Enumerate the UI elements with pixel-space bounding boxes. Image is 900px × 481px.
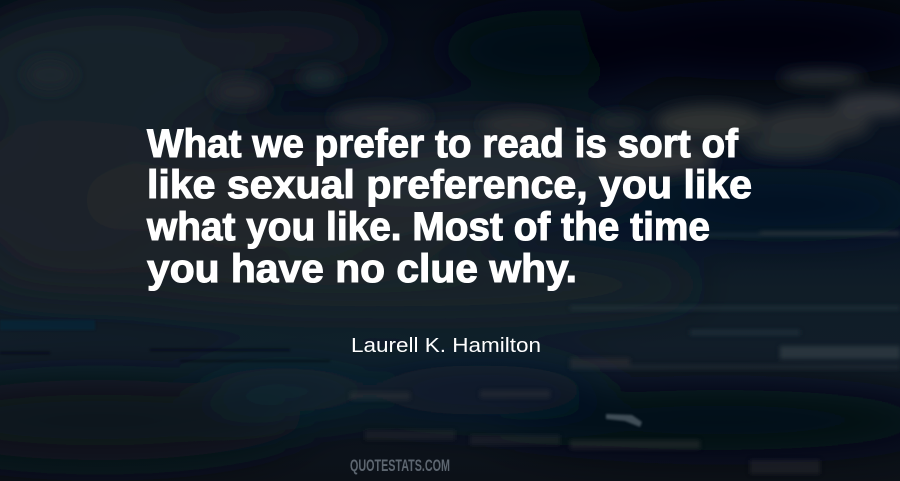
quote line 2: like sexual preference, you like [147, 163, 752, 207]
author name: Laurell K. Hamilton [351, 335, 541, 357]
quote line 3: what you like. Most of the time [146, 205, 710, 249]
background: cloud streaks [350, 232, 900, 474]
watermark: QUOTESTATS.COM [350, 456, 450, 475]
quote line 4: you have no clue why. [147, 247, 577, 291]
quote line 1: What we prefer to read is sort of [147, 122, 739, 166]
quote text [146, 122, 752, 291]
